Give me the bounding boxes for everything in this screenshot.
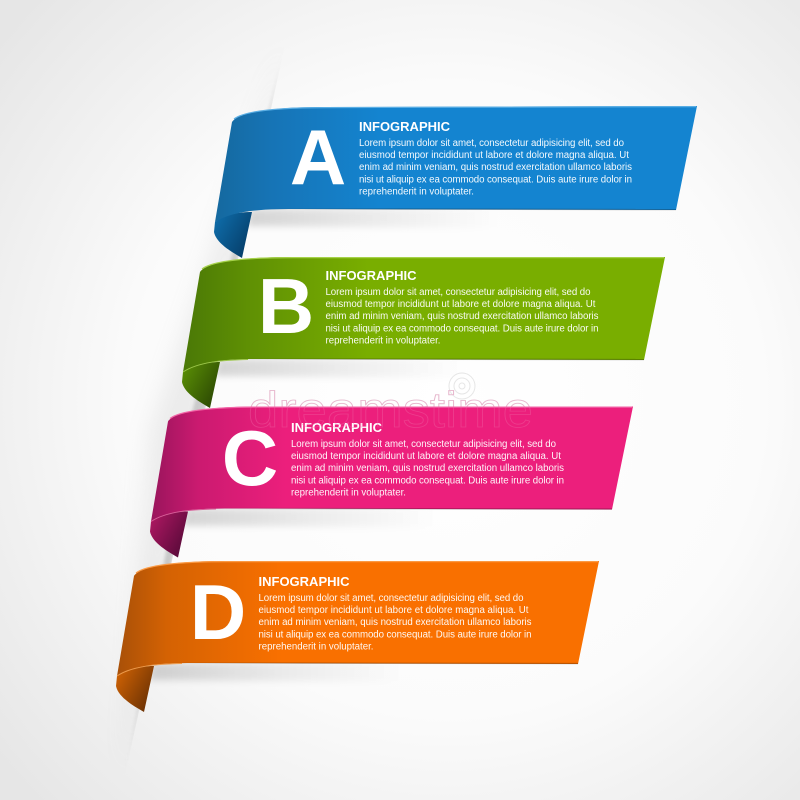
text block A: eiusmod tempor incididunt ut labore et dolore magna aliqua. Ut (359, 150, 629, 161)
band: ribbon B front (183, 257, 665, 372)
band: ribbon D front (117, 561, 599, 676)
panel: ribbon C (150, 382, 633, 558)
letter C: C (222, 414, 278, 502)
letter D: D (190, 568, 246, 656)
text block A: nisi ut aliquip ex ea commodo consequat. Duis aute irure dolor in (359, 174, 632, 185)
text block D: eiusmod tempor incididunt ut labore et dolore magna aliqua. Ut (258, 605, 529, 616)
letter A: A (290, 113, 346, 201)
band: ribbon A front (215, 106, 697, 222)
panel: ribbon B (182, 257, 665, 408)
text block C: eiusmod tempor incididunt ut labore et dolore magna aliqua. Ut (291, 451, 561, 462)
text block D (258, 593, 532, 652)
text block C (291, 439, 564, 498)
text block B: eiusmod tempor incididunt ut labore et dolore magna aliqua. Ut (326, 299, 596, 310)
text block C: reprehenderit in voluptater. (291, 488, 406, 498)
text block B: enim ad minim veniam, quis nostrud exercitation ullamco laboris (326, 311, 599, 322)
text block A: reprehenderit in voluptater. (359, 186, 474, 198)
text block B (326, 287, 599, 346)
fold: ribbon D back (116, 666, 154, 712)
text block C: Lorem ipsum dolor sit amet, consectetur adipisicing elit, sed do (291, 439, 556, 450)
heading A: INFOGRAPHIC (359, 119, 451, 134)
watermark overlay on C: dreamstime (248, 382, 533, 438)
band: ribbon C front (151, 406, 633, 522)
fold: ribbon C back (150, 512, 188, 558)
page slit with shadow (132, 85, 276, 736)
heading D: INFOGRAPHIC (258, 574, 350, 589)
text block D: reprehenderit in voluptater. (258, 642, 374, 652)
fold: ribbon A back (214, 212, 252, 258)
watermark backdrop: dreamstime (248, 382, 533, 438)
text block A: enim ad minim veniam, quis nostrud exercitation ullamco laboris (359, 162, 632, 173)
text block C: enim ad minim veniam, quis nostrud exercitation ullamco laboris (291, 463, 564, 474)
text block D: Lorem ipsum dolor sit amet, consectetur adipisicing elit, sed do (258, 593, 524, 604)
heading B: INFOGRAPHIC (326, 268, 417, 283)
text block A: Lorem ipsum dolor sit amet, consectetur adipisicing elit, sed do (359, 138, 624, 149)
text block C: nisi ut aliquip ex ea commodo consequat. Duis aute irure dolor in (291, 475, 564, 486)
text block D: nisi ut aliquip ex ea commodo consequat. Duis aute irure dolor in (258, 629, 532, 640)
text block B: nisi ut aliquip ex ea commodo consequat. Duis aute irure dolor in (326, 323, 598, 334)
text block D: enim ad minim veniam, quis nostrud exercitation ullamco laboris (258, 617, 532, 628)
text block B: Lorem ipsum dolor sit amet, consectetur adipisicing elit, sed do (326, 287, 590, 298)
panel: ribbon A (214, 106, 697, 258)
text block B: reprehenderit in voluptater. (326, 336, 440, 346)
fold: ribbon B back (182, 362, 220, 408)
letter B: B (258, 262, 314, 350)
text block A (359, 138, 632, 198)
panel: ribbon D (116, 561, 599, 712)
heading C: INFOGRAPHIC (291, 420, 383, 435)
